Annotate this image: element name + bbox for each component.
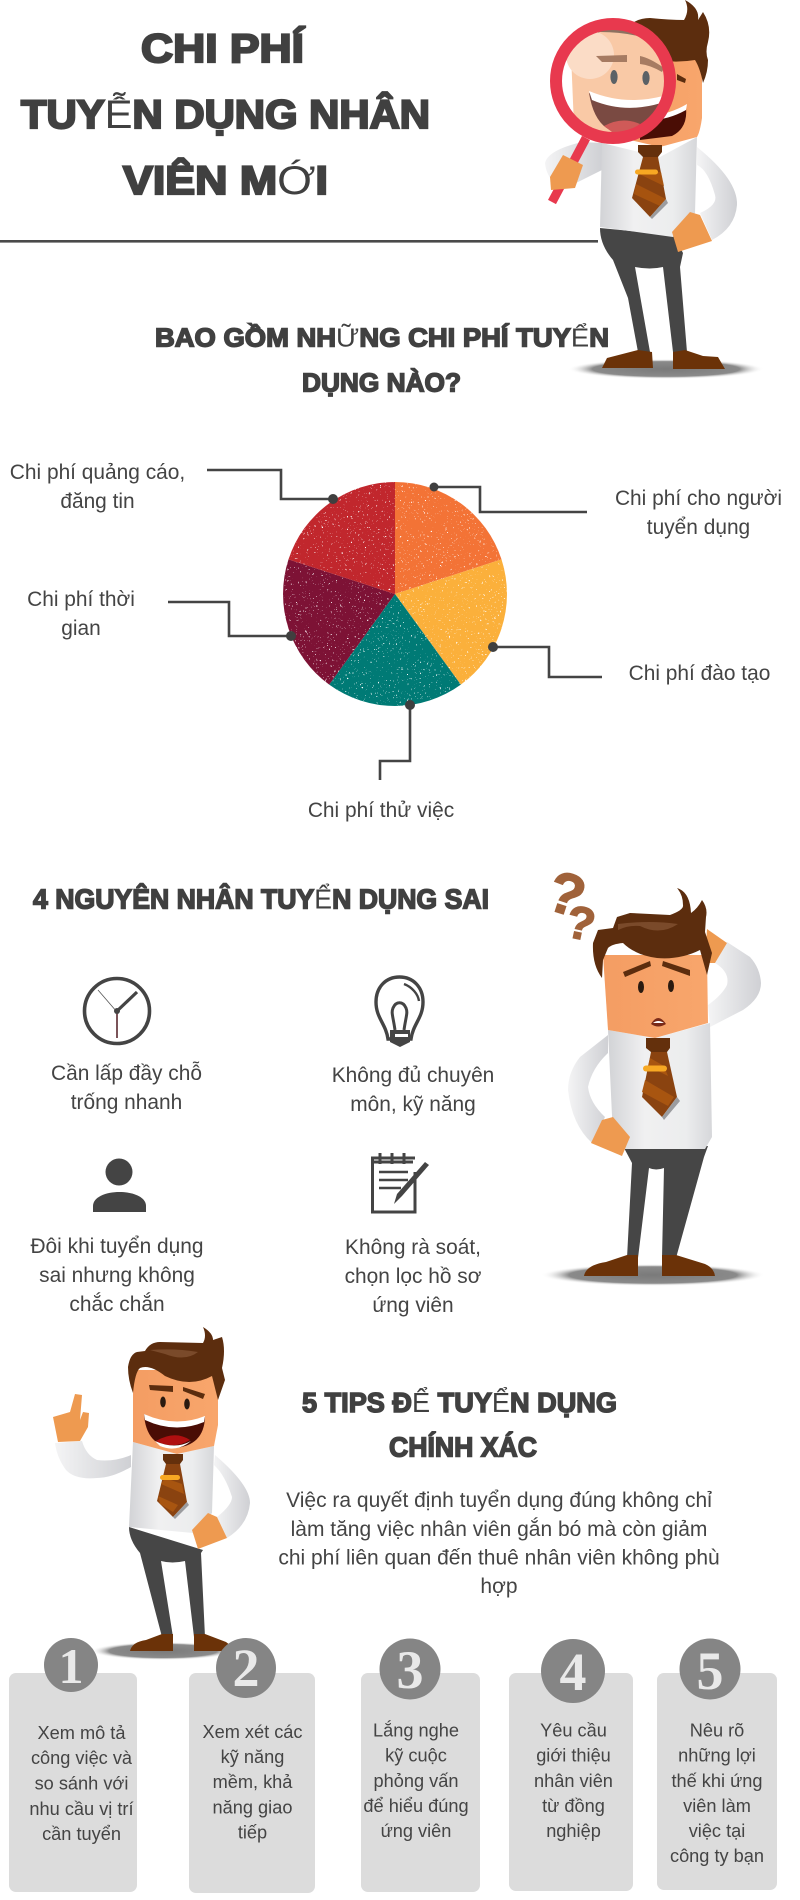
text: reason 1: trống nhanh [71,1091,182,1114]
heading: cost types: BAO GỒM NH ỮNG CHI PHÍ TUY ỂN [155,322,609,352]
panel: tip 5: viên làm [683,1796,751,1816]
label: probation cost: Chi phí thử việc [308,799,454,822]
text: reason 2: môn, kỹ năng [350,1093,476,1116]
text: reason 1 [51,1062,202,1114]
panel: tip 4: nhân viên [534,1771,613,1791]
heading: 4 reasons: 4 NGUYÊN NHÂN TUYỂN DỤNG SAI [33,884,489,914]
panel: tip 3: kỹ cuộc [385,1746,447,1766]
illustration: confused man [540,858,765,1286]
panel: tip 4: Yêu cầu [540,1720,607,1740]
text: reason 1: Cần lấp đầy chỗ [51,1062,202,1085]
label: advertising cost [10,461,185,513]
panel: tip 2: năng giao [213,1798,292,1818]
text: reason 3 [30,1235,204,1316]
text: reason 4: ứng viên [372,1294,454,1317]
panel: tip 2: kỹ năng [221,1747,284,1767]
panel: tip 2: Xem xét các [202,1722,303,1742]
panel: tip 2: 2 [232,1638,260,1698]
panel: tip 4: nghiệp [546,1821,601,1841]
question marks: ? [562,895,600,951]
panel: tip 3 [361,1638,480,1892]
leader: recruiter [430,482,587,512]
panel: tip 4: 4 [560,1642,586,1702]
panel: tip 3: 3 [396,1640,424,1700]
panel: tip 3: phỏng vấn [374,1771,458,1791]
title: TUYỄN DỤNG NHÂN [21,91,430,137]
text: reason 2 [332,1064,494,1116]
icon: person [93,1158,146,1212]
label: recruiter cost [615,487,782,539]
pie chart [283,482,507,706]
panel: tip 4 [509,1639,633,1891]
panel: tip 5: những lợi [678,1746,756,1766]
leader: advertising [207,470,338,504]
icon: notepad with pencil [372,1153,429,1212]
heading: 5 tips [302,1387,617,1462]
heading: cost types: DỤNG NÀO? [302,368,461,398]
text: tips intro: chi phí liên quan đến thuê nhân viên không phù [278,1546,720,1570]
label: time cost [27,588,135,640]
text: reason 4 [345,1236,482,1317]
text: tips intro: Việc ra quyết định tuyển dụng đúng không chỉ [286,1489,712,1512]
title divider line [0,240,598,243]
panel: tip 2 [189,1638,315,1893]
panel: tip 1: 1 [58,1638,84,1694]
panel: tip 5: 5 [696,1641,724,1701]
text: reason 2: Không đủ chuyên [332,1064,494,1087]
heading: cost types [155,322,609,398]
panel: tip 3: để hiểu đúng [363,1796,469,1816]
panel: tip 1: công việc và [31,1748,133,1768]
text: tips intro: hợp [480,1575,518,1598]
panel: tip 5 [657,1638,777,1890]
panel: tip 4: giới thiệu [536,1746,611,1766]
label: time cost: gian [61,617,101,640]
heading: 5 tips: CHÍNH XÁC [389,1432,537,1462]
panel: tip 1: so sánh với [35,1774,128,1794]
text: reason 4: Không rà soát, [345,1236,481,1259]
heading: 5 tips: 5 TIPS ĐỂ TUYỂN DỤNG [302,1387,617,1418]
panel: tip 1: cần tuyển [42,1824,121,1844]
label: advertising cost: đăng tin [60,490,135,513]
label: advertising cost: Chi phí quảng cáo, [10,461,185,484]
panel: tip 2: tiếp [238,1822,267,1842]
panel: tip 5: thế khi ứng [671,1771,763,1791]
panel: tip 2: mềm, khả [213,1772,293,1792]
leader: time [168,602,296,641]
panel: tip 4: từ đồng [542,1796,605,1816]
text: tips intro: làm tăng việc nhân viên gắn bó mà còn giảm [291,1518,707,1541]
illustration: man pointing up [53,1327,250,1660]
question marks [540,858,600,951]
label: recruiter cost: Chi phí cho người [615,487,782,510]
panel: tip 1: Xem mô tả [38,1723,126,1743]
panel: tip 5: việc tại [689,1821,745,1841]
panel: tip 3: Lắng nghe [373,1720,459,1740]
panel: tip 5: Nêu rõ [690,1720,744,1740]
panel: tip 1: nhu cầu vị trí [29,1799,134,1819]
text: reason 3: chắc chắn [69,1293,165,1316]
text: reason 4: chọn lọc hồ sơ [345,1265,482,1288]
title: CHI PHÍ [141,26,305,71]
text: tips intro [278,1489,720,1598]
title: VIÊN M ỚI [123,157,328,203]
magnifier lens [553,20,680,150]
illustration: man with magnifying glass [545,0,764,379]
panel: tip 5: công ty bạn [670,1846,764,1866]
label: time cost: Chi phí thời [27,588,135,611]
label: training cost: Chi phí đào tạo [629,662,770,685]
title [21,26,430,203]
leader: training [488,642,602,677]
panel: tip 1 [9,1638,137,1892]
label: recruiter cost: tuyển dụng [647,516,750,539]
text: reason 3: sai nhưng không [39,1264,195,1287]
leader: probation [380,700,415,780]
question marks: ? [540,858,593,931]
icon: light bulb [376,977,423,1047]
panel: tip 3: ứng viên [381,1821,451,1841]
icon: clock [84,978,150,1044]
text: reason 3: Đôi khi tuyển dụng [30,1235,204,1258]
